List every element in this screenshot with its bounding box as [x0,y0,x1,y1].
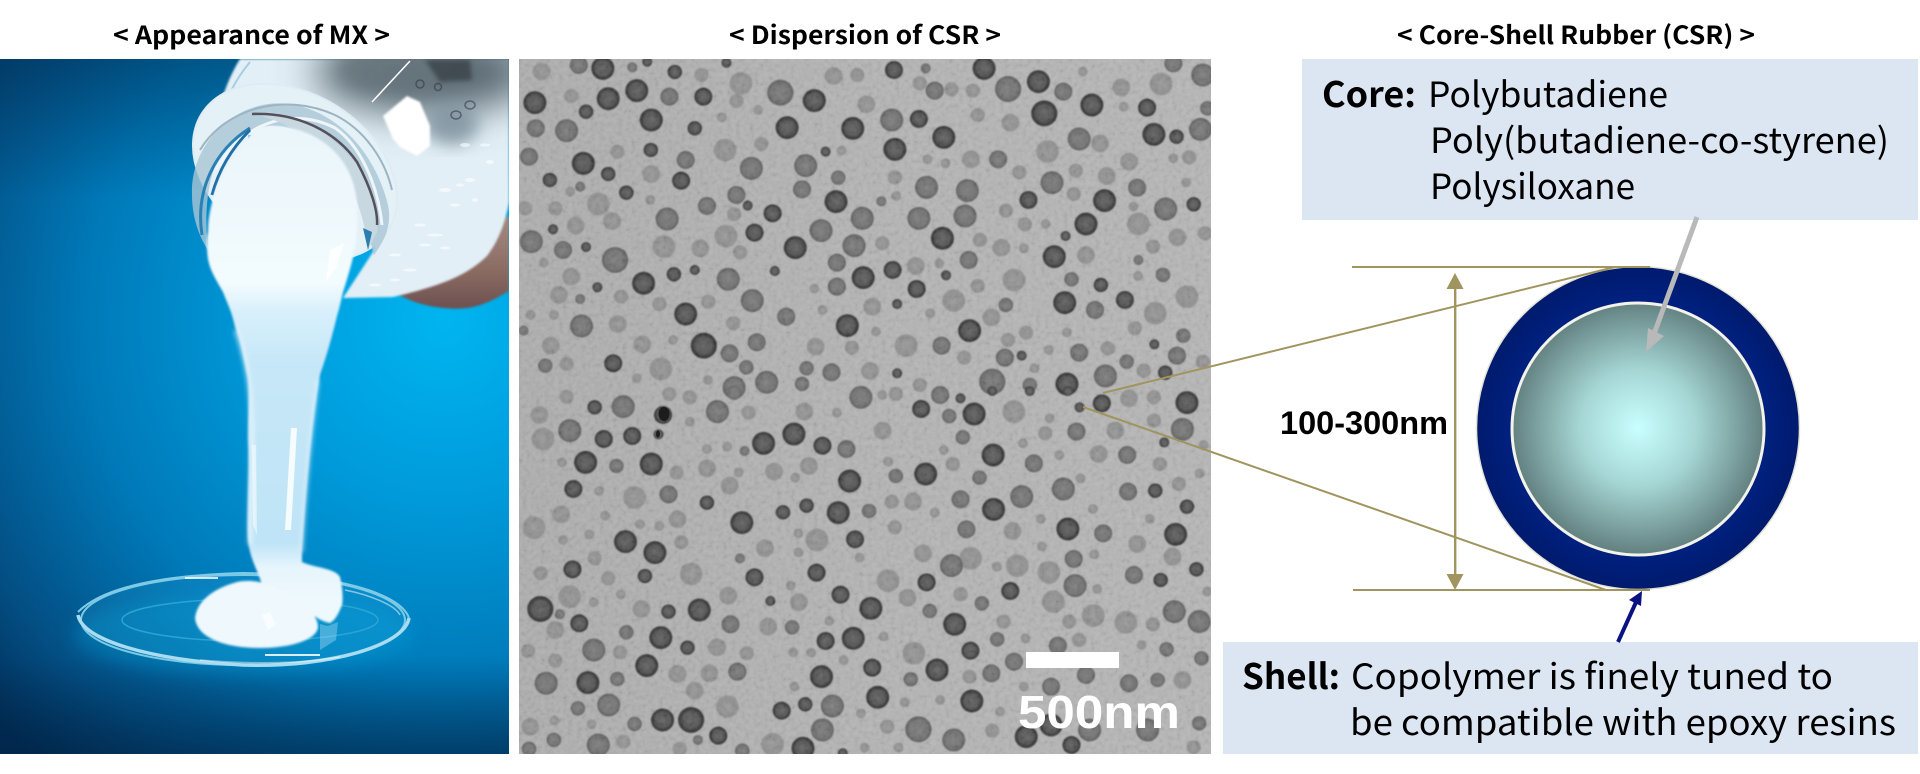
title: Appearance of MX: < Appearance of MX > [113,16,390,52]
shell label box: Copolymer is finely tuned to [1351,649,1833,700]
film grain [519,59,1211,754]
panel: TEM micrograph of CSR dispersion [518,54,1215,760]
CSR particles [518,54,1215,760]
zoom lines from TEM particle to diagram [1083,267,1650,590]
hand holding bottle [398,216,509,309]
core label box: Polybutadiene [1428,67,1668,118]
diagram: core-shell particle [1476,266,1800,590]
petri dish [73,573,413,675]
size label: 100-300nm [1280,405,1448,441]
core label box: Poly(butadiene-co-styrene) [1430,113,1889,164]
core label box [1302,59,1918,220]
shell label box: Shell: [1242,649,1340,700]
shell label box: be compatible with epoxy resins [1350,695,1896,746]
liquid highlights [236,243,344,650]
dish front highlights [185,578,400,663]
scale label: 500nm [1018,686,1180,738]
panel: photo of white liquid poured from bottle [0,30,535,754]
bottle [192,59,509,300]
bottle neck [192,88,392,258]
core label box: Core: [1322,67,1416,118]
arrow: core label to core [1646,217,1697,352]
title: Core-Shell Rubber: < Core-Shell Rubber (CSR) > [1397,16,1755,52]
black debris near centre [656,407,670,438]
core label box: Polysiloxane [1430,159,1635,210]
size dimension arrow [1446,273,1464,590]
shell label box [1223,642,1918,754]
arrow: shell label to shell [1618,591,1642,642]
pouring liquid and puddle [195,126,357,648]
title: Dispersion of CSR: < Dispersion of CSR > [729,16,1001,52]
scale bar [1026,652,1119,668]
